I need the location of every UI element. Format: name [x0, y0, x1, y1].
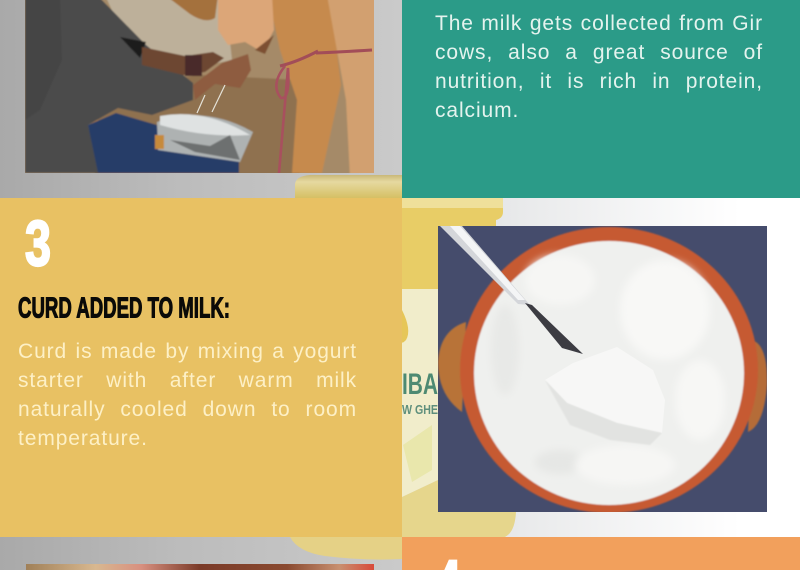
- panel: step 3 curd added to milk (gold): [0, 198, 402, 537]
- panel: step 2 milk collection (teal): [402, 0, 800, 198]
- text: curd description: naturally cooled down to room: [18, 398, 357, 421]
- photo: man milking a cow into a steel bucket: [25, 0, 374, 173]
- text: curd description: temperature.: [18, 427, 148, 450]
- text: milk collection description: cows, also a great source of: [435, 41, 763, 64]
- text: curd description: [18, 340, 357, 450]
- background: grey top left: [0, 0, 402, 198]
- panel: step 4 (orange): [402, 537, 800, 570]
- text: milk collection description: The milk gets collected from Gir: [435, 12, 763, 35]
- text: curd description: starter with after warm milk: [18, 369, 357, 392]
- text: milk collection description: nutrition, it is rich in protein,: [435, 70, 763, 93]
- ghee jar behind the panels: W GHE: [402, 402, 438, 417]
- background: grey bottom left: [0, 537, 402, 570]
- text: milk collection description: calcium.: [435, 99, 519, 122]
- text: milk collection description: [435, 12, 763, 122]
- photo: bottom-left cropped image strip: [26, 564, 374, 570]
- background: right side white gradient: [402, 198, 800, 537]
- photo: clay bowl of white curd with a spoon: [438, 226, 767, 512]
- ghee jar behind the panels: IBA: [402, 368, 438, 401]
- text: curd description: Curd is made by mixing a yogurt: [18, 340, 357, 363]
